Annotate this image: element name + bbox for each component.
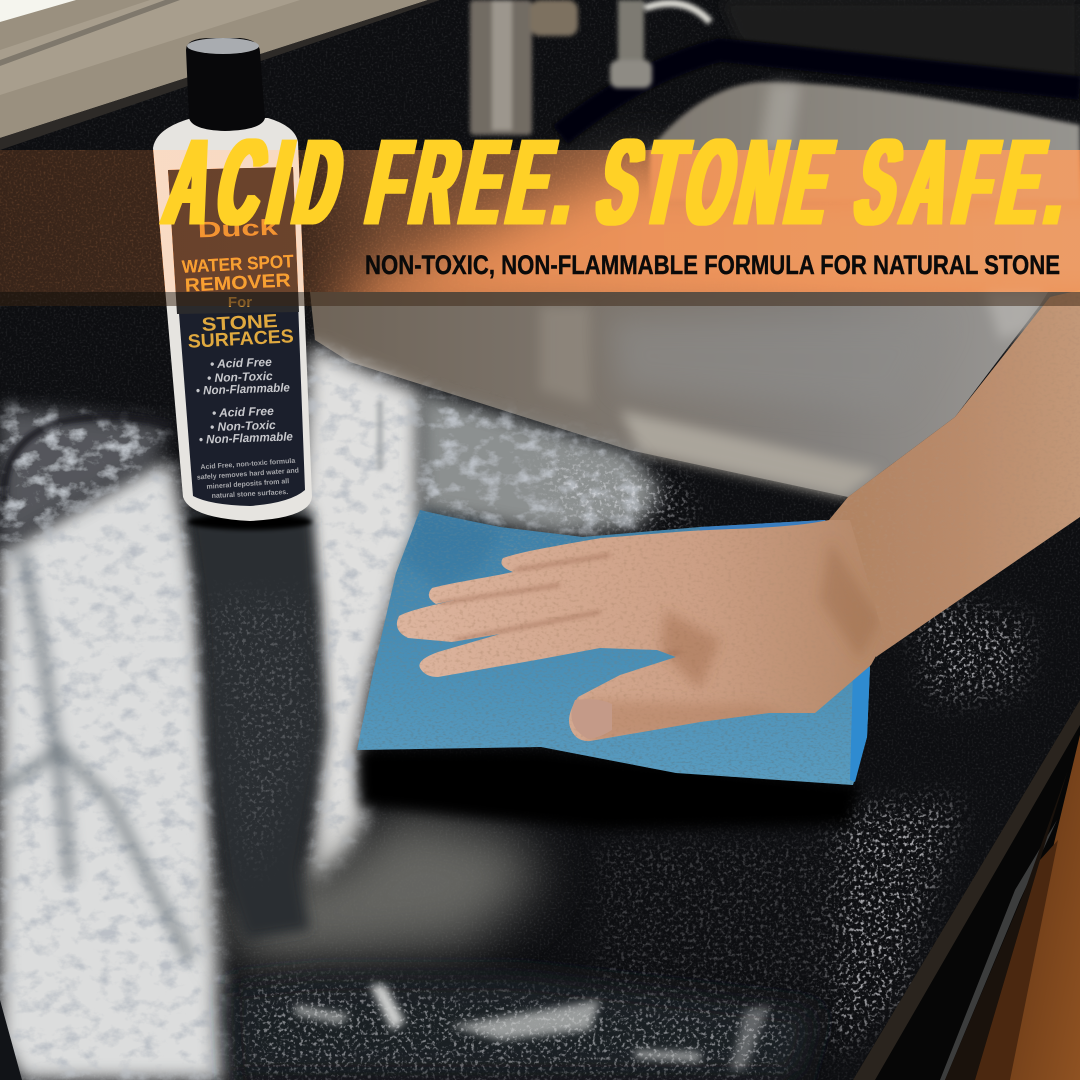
bottle shadow contact	[188, 514, 312, 530]
bottle label upper field	[168, 167, 299, 314]
bottle label	[168, 167, 305, 506]
title: ACID	[155, 113, 355, 250]
blue microfiber towel	[357, 510, 870, 785]
bottle label text: • Non-Toxic	[207, 369, 273, 385]
hand wiping towel	[396, 520, 876, 742]
bottle label text: safely removes hard water and	[197, 467, 299, 482]
title: SAFE.	[845, 113, 1080, 250]
bottle label text: Acid Free, non-toxic formula	[200, 458, 296, 471]
hand shading	[590, 540, 880, 745]
headline band	[0, 150, 1080, 306]
white residue and speckles on counter	[210, 450, 1030, 1075]
forearm	[829, 290, 1080, 657]
cabinet and counter edge	[853, 700, 1080, 1080]
bottle body	[153, 118, 312, 521]
thumbnail	[571, 699, 612, 739]
title: FREE.	[357, 113, 590, 250]
bottle label text: • Acid Free	[210, 355, 272, 371]
bottle reflection	[187, 510, 325, 940]
polished stone reflections	[0, 345, 820, 1080]
bottle label text: WATER SPOT	[181, 251, 294, 277]
bottle cap	[186, 38, 265, 131]
bottle label text: For	[228, 294, 252, 311]
lower sink basin	[310, 292, 1048, 497]
faucet	[470, 0, 710, 135]
product bottle	[153, 38, 312, 530]
window sill top left	[0, 0, 440, 150]
bottle label text: • Acid Free	[212, 404, 274, 420]
towel shadow	[360, 750, 860, 830]
title: STONE	[587, 113, 844, 250]
bottle label text: SURFACES	[187, 326, 294, 353]
bottle label text: mineral deposits from all	[206, 478, 290, 491]
title	[155, 113, 1080, 250]
sink basin behind the band and upper rim	[340, 50, 1080, 320]
bottle label text	[181, 215, 299, 500]
bottle label text: STONE	[201, 311, 278, 336]
bottle label text: Duck	[197, 215, 279, 242]
bottle label text: • Non-Toxic	[210, 418, 276, 434]
bottle label text: natural stone surfaces.	[211, 489, 288, 500]
knuckle creases	[440, 555, 680, 655]
bottle label text: • Non-Flammable	[196, 380, 290, 398]
bottle label text: • Non-Flammable	[199, 429, 293, 447]
bottle label text: REMOVER	[184, 270, 291, 297]
